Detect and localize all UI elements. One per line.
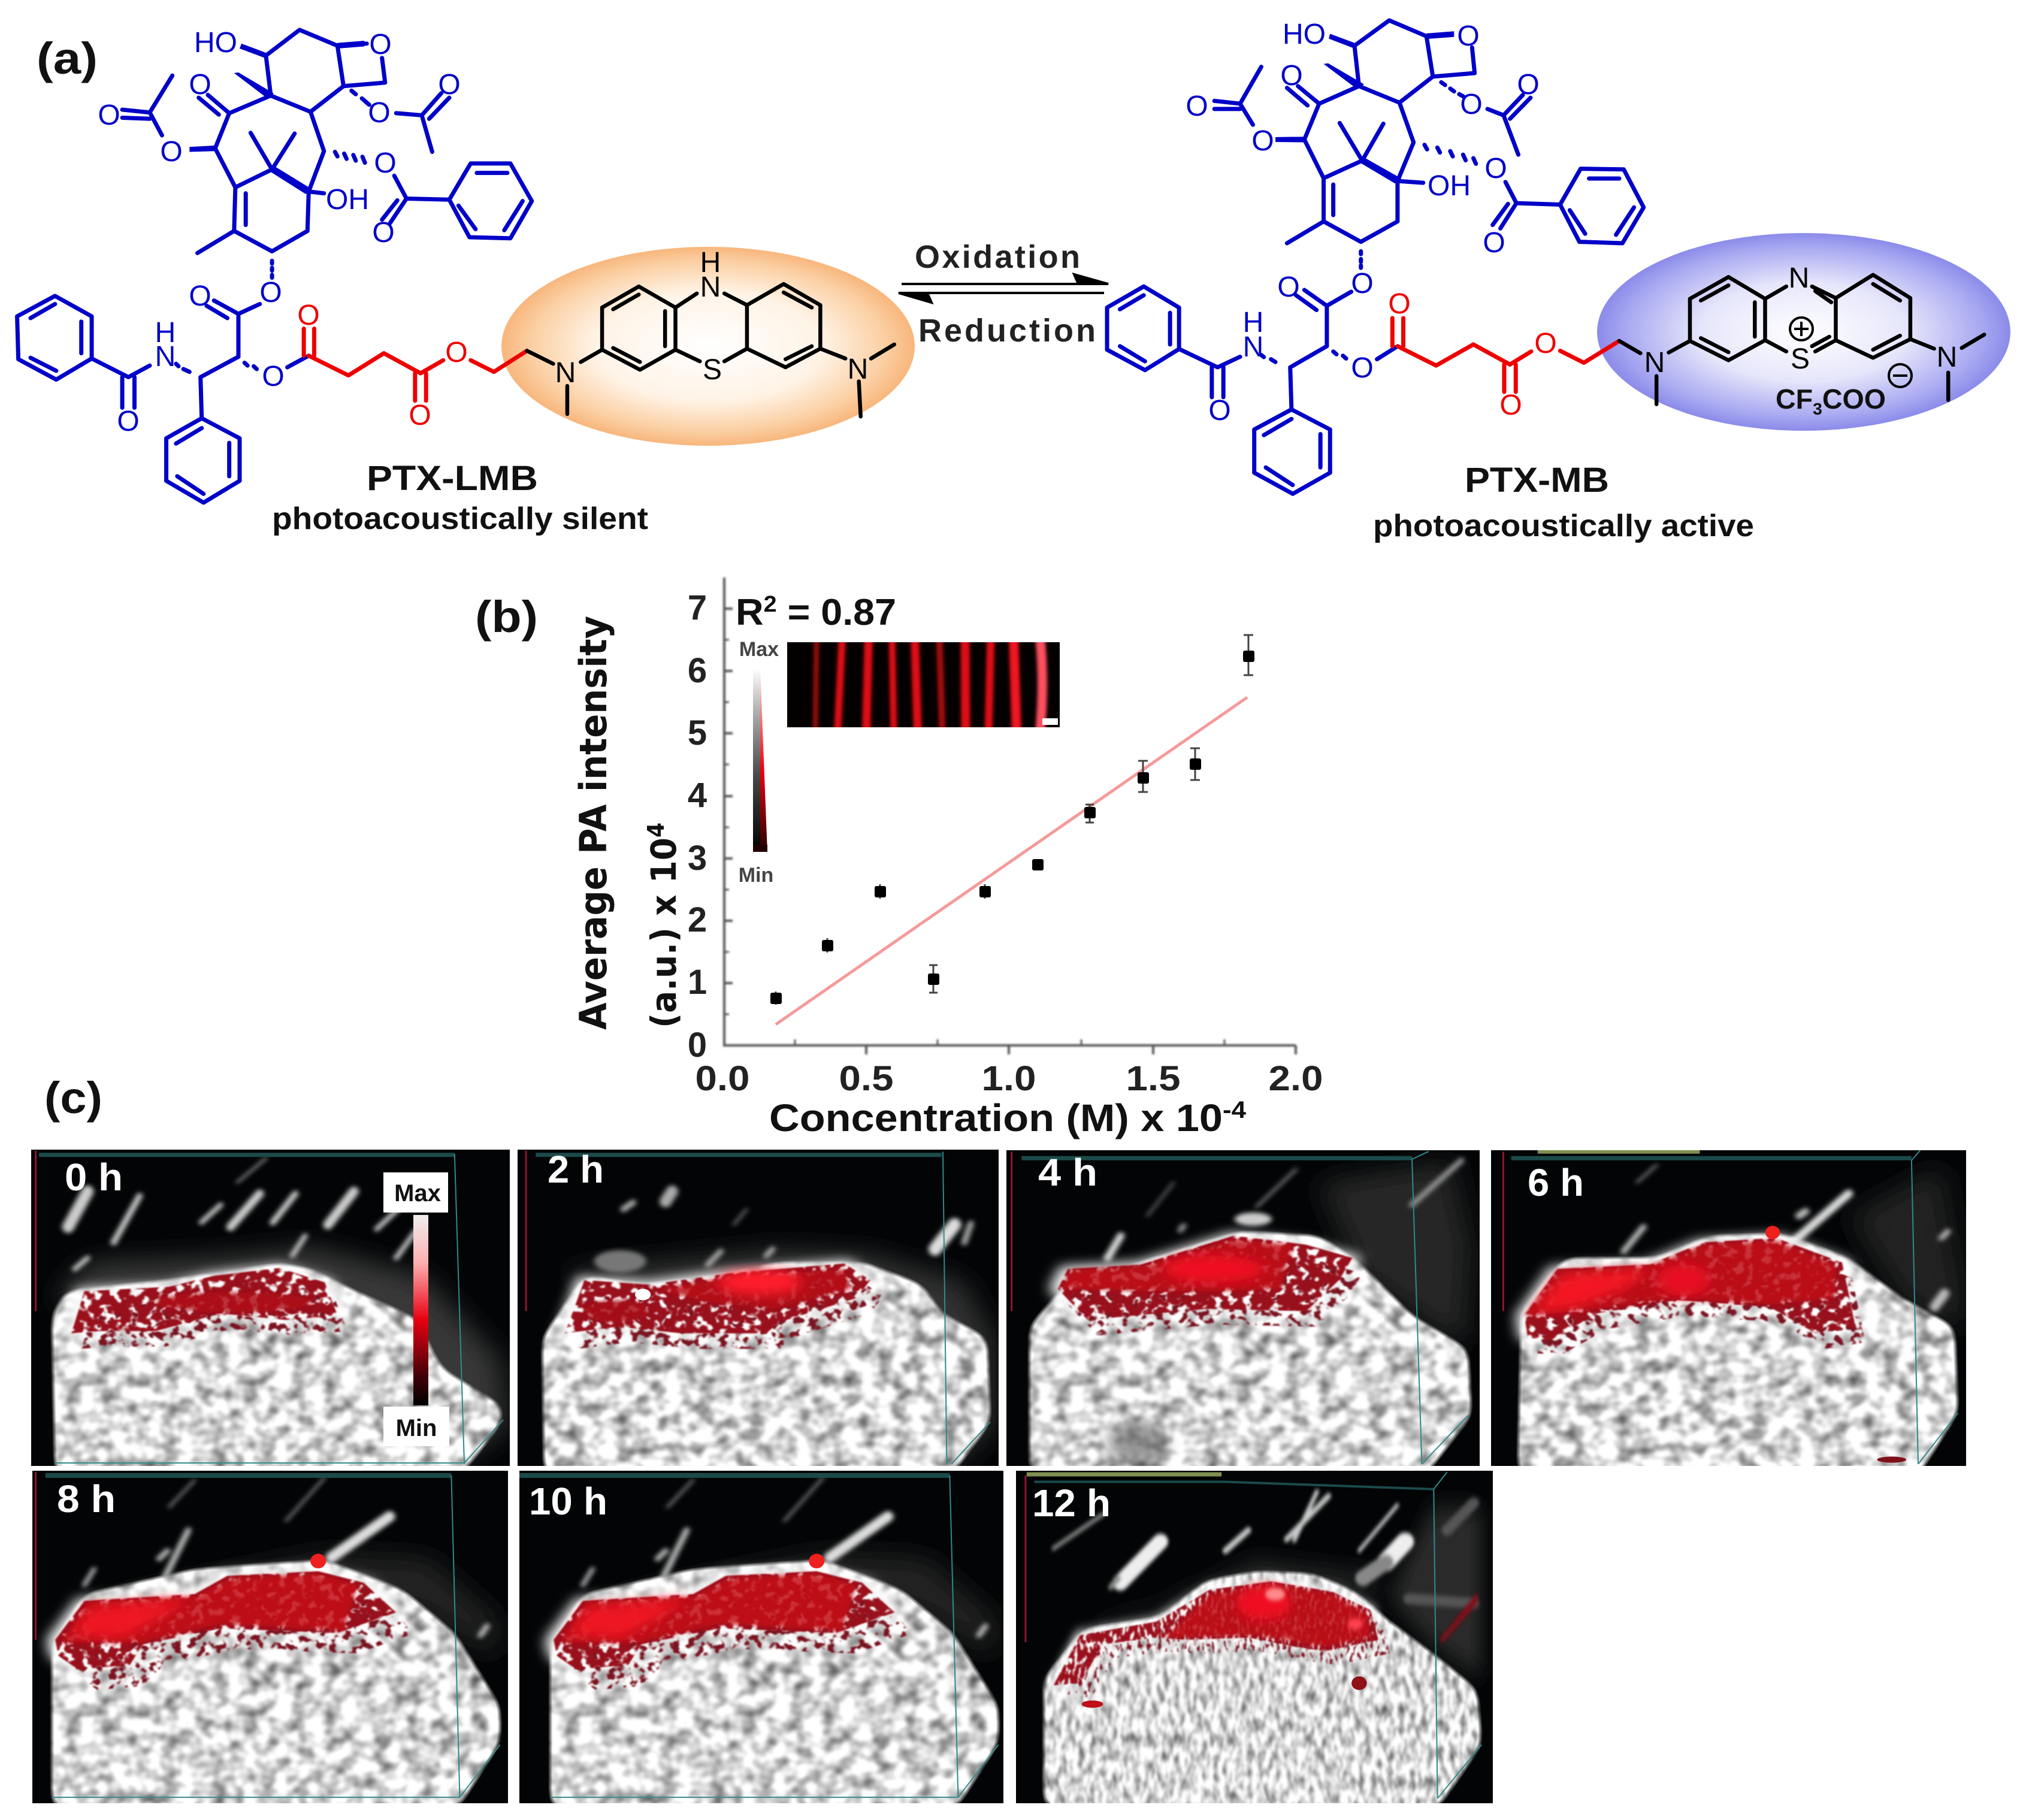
- panel: 8 h image: [32, 1471, 508, 1809]
- y axis tick labels: [688, 588, 707, 1065]
- y axis title: Average PA intensity: [571, 616, 615, 1030]
- blue atom labels: O: [262, 361, 285, 392]
- blue atom labels: N: [1243, 331, 1263, 363]
- black atom labels: H: [700, 247, 721, 279]
- panel: 0 h image: [31, 1150, 510, 1475]
- leuco methylene blue bonds (black): [527, 284, 894, 416]
- red atom labels: [1388, 288, 1557, 421]
- blue atom labels: O: [259, 277, 282, 309]
- black atom labels: N: [700, 271, 721, 303]
- y axis units: (a.u.) x 10: [643, 827, 684, 1028]
- red atom labels: [297, 300, 468, 431]
- redox equilibrium arrows: [899, 239, 1108, 349]
- y axis tick labels: 1: [688, 963, 707, 1002]
- scale legend: Min: [396, 1415, 437, 1441]
- y axis tick labels: 7: [688, 588, 707, 627]
- panel: PA calibration chart: [571, 578, 1323, 1139]
- red atom labels: O: [1388, 288, 1411, 320]
- blue atom labels: OH: [1428, 170, 1471, 202]
- panel: 12 h image: [1016, 1471, 1493, 1809]
- fit annotation: 2: [764, 592, 777, 617]
- stereo wedge bonds (blue): [1275, 31, 1454, 183]
- blue atom labels: [98, 27, 461, 437]
- blue atom labels: HO: [194, 27, 237, 59]
- blue atom labels: O: [368, 97, 391, 129]
- blue atom labels: O: [372, 217, 395, 249]
- blue atom labels: O: [189, 280, 211, 312]
- blue atom labels: O: [438, 69, 461, 101]
- time label: 0 h: [65, 1156, 123, 1199]
- y axis tick labels: 4: [688, 776, 707, 815]
- red atom labels: O: [297, 300, 320, 331]
- methylene blue ellipse (blue): [1597, 233, 2010, 431]
- y axis tick labels: 6: [688, 651, 707, 690]
- black atom labels: S: [703, 354, 722, 386]
- succinate linker (red): [304, 329, 527, 401]
- inset colour bar: [739, 638, 779, 887]
- x axis title: Concentration (M) x 10: [769, 1096, 1183, 1139]
- succinate linker (red): [1392, 318, 1619, 392]
- blue atom labels: O: [98, 99, 120, 131]
- compound name: PTX-LMB: [367, 459, 538, 498]
- arrow label: reduction: Reduction: [918, 313, 1096, 349]
- blue atom labels: OH: [326, 184, 369, 216]
- colour bar max label: Max: [739, 638, 779, 661]
- scale legend: [383, 1172, 449, 1446]
- black atom labels: N: [848, 353, 868, 385]
- blue atom labels: O: [1280, 60, 1303, 92]
- compound name: PTX-MB: [1465, 461, 1609, 500]
- y axis units: 4: [643, 823, 669, 838]
- time label: 4 h: [1038, 1151, 1097, 1194]
- chart axes: [724, 578, 1296, 1054]
- black atom labels: N: [1789, 262, 1809, 294]
- time label: 10 h: [529, 1480, 607, 1523]
- blue atom labels: O: [1351, 268, 1374, 300]
- black atom labels: N: [1644, 347, 1665, 379]
- panel: 6 h image: [1491, 1150, 1966, 1475]
- paclitaxel fragment bonds: [1107, 20, 1644, 494]
- counter-ion label: COO: [1822, 383, 1886, 415]
- x axis title: -4: [1223, 1097, 1247, 1123]
- x axis tick labels: [695, 1059, 1323, 1098]
- time label: 12 h: [1032, 1482, 1111, 1525]
- panel label (b): (b): [475, 592, 538, 642]
- data points: [770, 651, 1254, 1004]
- red atom labels: O: [445, 337, 468, 368]
- counter-ion label: CF: [1776, 383, 1812, 415]
- time label: 2 h: [548, 1148, 604, 1191]
- fit annotation: R: [736, 592, 763, 633]
- blue atom labels: N: [155, 341, 176, 373]
- fit annotation: = 0.87: [777, 592, 896, 633]
- compound description: photoacoustically silent: [272, 501, 648, 536]
- x axis tick labels: 0.0: [695, 1059, 750, 1098]
- negative charge symbol: [1889, 364, 1912, 387]
- error bars: [776, 635, 1253, 1005]
- blue atom labels: O: [1517, 69, 1540, 101]
- linear fit line: [776, 697, 1247, 1024]
- black atom labels: [1644, 262, 1957, 379]
- blue atom labels: O: [1186, 90, 1208, 122]
- positive charge symbol: [1790, 318, 1813, 340]
- time label: 6 h: [1528, 1161, 1584, 1204]
- counter-ion label: 3: [1813, 400, 1822, 418]
- colour bar min label: Min: [739, 864, 773, 887]
- black atom labels: N: [555, 357, 576, 389]
- blue atom labels: O: [160, 136, 183, 168]
- blue atom labels: O: [1484, 153, 1507, 185]
- methylene blue bonds (black): [1619, 275, 1984, 404]
- stereo wedge bonds (blue): [189, 41, 364, 194]
- panel: 10 h image: [510, 1471, 1003, 1809]
- blue atom labels: O: [189, 69, 211, 101]
- inset: phantom image: [787, 642, 1060, 727]
- blue atom labels: O: [374, 147, 397, 179]
- y axis tick labels: 0: [688, 1026, 707, 1065]
- blue atom labels: H: [1243, 307, 1263, 338]
- blue atom labels: O: [1208, 395, 1231, 427]
- black atom labels: [555, 247, 868, 389]
- panel: 2 h image: [518, 1148, 999, 1475]
- panel: PTX-LMB structure: [17, 27, 915, 536]
- panel label (c): (c): [44, 1073, 102, 1123]
- x axis tick labels: 1.0: [981, 1059, 1036, 1098]
- blue atom labels: [1186, 19, 1540, 427]
- blue atom labels: H: [155, 317, 176, 349]
- arrow label: oxidation: Oxidation: [915, 239, 1080, 275]
- paclitaxel fragment bonds: [17, 30, 532, 503]
- red atom labels: O: [1534, 328, 1557, 359]
- time label: 8 h: [57, 1477, 116, 1520]
- y axis tick labels: 5: [688, 714, 707, 752]
- x axis tick labels: 1.5: [1126, 1059, 1180, 1098]
- blue atom labels: O: [369, 29, 392, 61]
- compound description: photoacoustically active: [1373, 509, 1754, 543]
- black atom labels: N: [1937, 341, 1957, 373]
- blue atom labels: O: [1251, 125, 1274, 157]
- panel label (a): (a): [37, 34, 98, 83]
- blue atom labels: O: [1277, 271, 1300, 303]
- scale legend: Max: [394, 1180, 441, 1207]
- blue atom labels: O: [117, 406, 140, 437]
- red atom labels: O: [409, 400, 431, 431]
- methylene blue leuco ellipse (orange): [501, 247, 915, 446]
- panel: PTX-MB structure: [1107, 19, 2010, 543]
- x axis tick labels: 0.5: [839, 1059, 894, 1098]
- x axis tick labels: 2.0: [1269, 1059, 1323, 1098]
- blue atom labels: O: [1457, 20, 1480, 52]
- panel: 4 h image: [1006, 1150, 1480, 1475]
- y axis tick labels: 3: [688, 839, 707, 878]
- red atom labels: O: [1499, 389, 1522, 421]
- y axis tick labels: 2: [688, 900, 707, 939]
- blue atom labels: O: [1483, 227, 1505, 259]
- blue atom labels: HO: [1283, 19, 1326, 50]
- blue atom labels: O: [1351, 352, 1374, 384]
- blue atom labels: O: [1460, 89, 1483, 120]
- black atom labels: S: [1791, 343, 1810, 375]
